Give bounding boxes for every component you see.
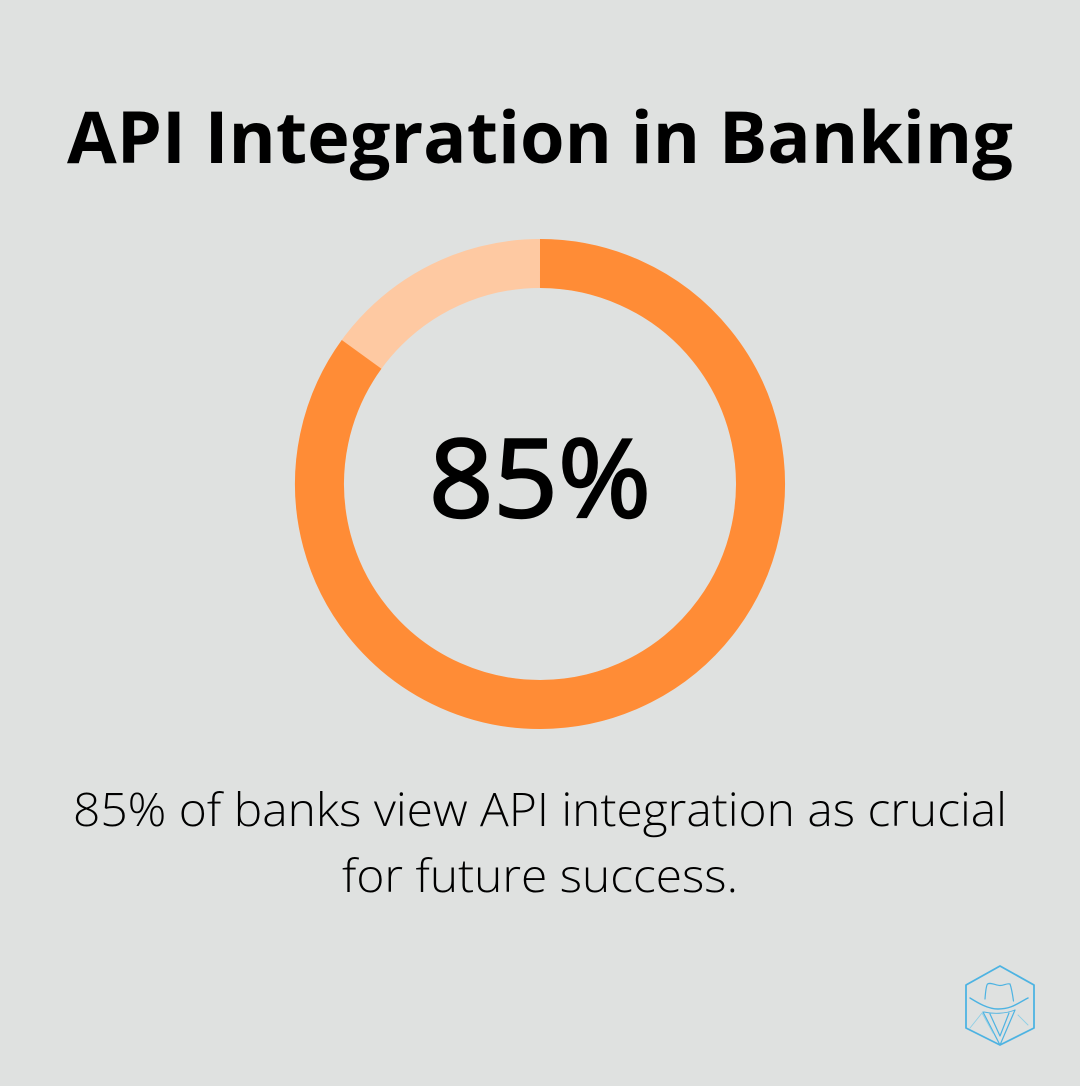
donut chart: 85% bbox=[319, 264, 760, 704]
description text: 85% of banks view API integration as crucial bbox=[73, 778, 1007, 840]
icon: logo hexagon with spy hat bbox=[966, 966, 1034, 1045]
description text bbox=[73, 778, 1007, 906]
donut segment: remaining 15% bbox=[320, 264, 760, 704]
title: API Integration in Banking bbox=[67, 87, 1013, 185]
center value: 85% bbox=[429, 402, 651, 549]
description text: for future success. bbox=[342, 844, 738, 906]
donut segment: 85% bbox=[319, 264, 760, 704]
